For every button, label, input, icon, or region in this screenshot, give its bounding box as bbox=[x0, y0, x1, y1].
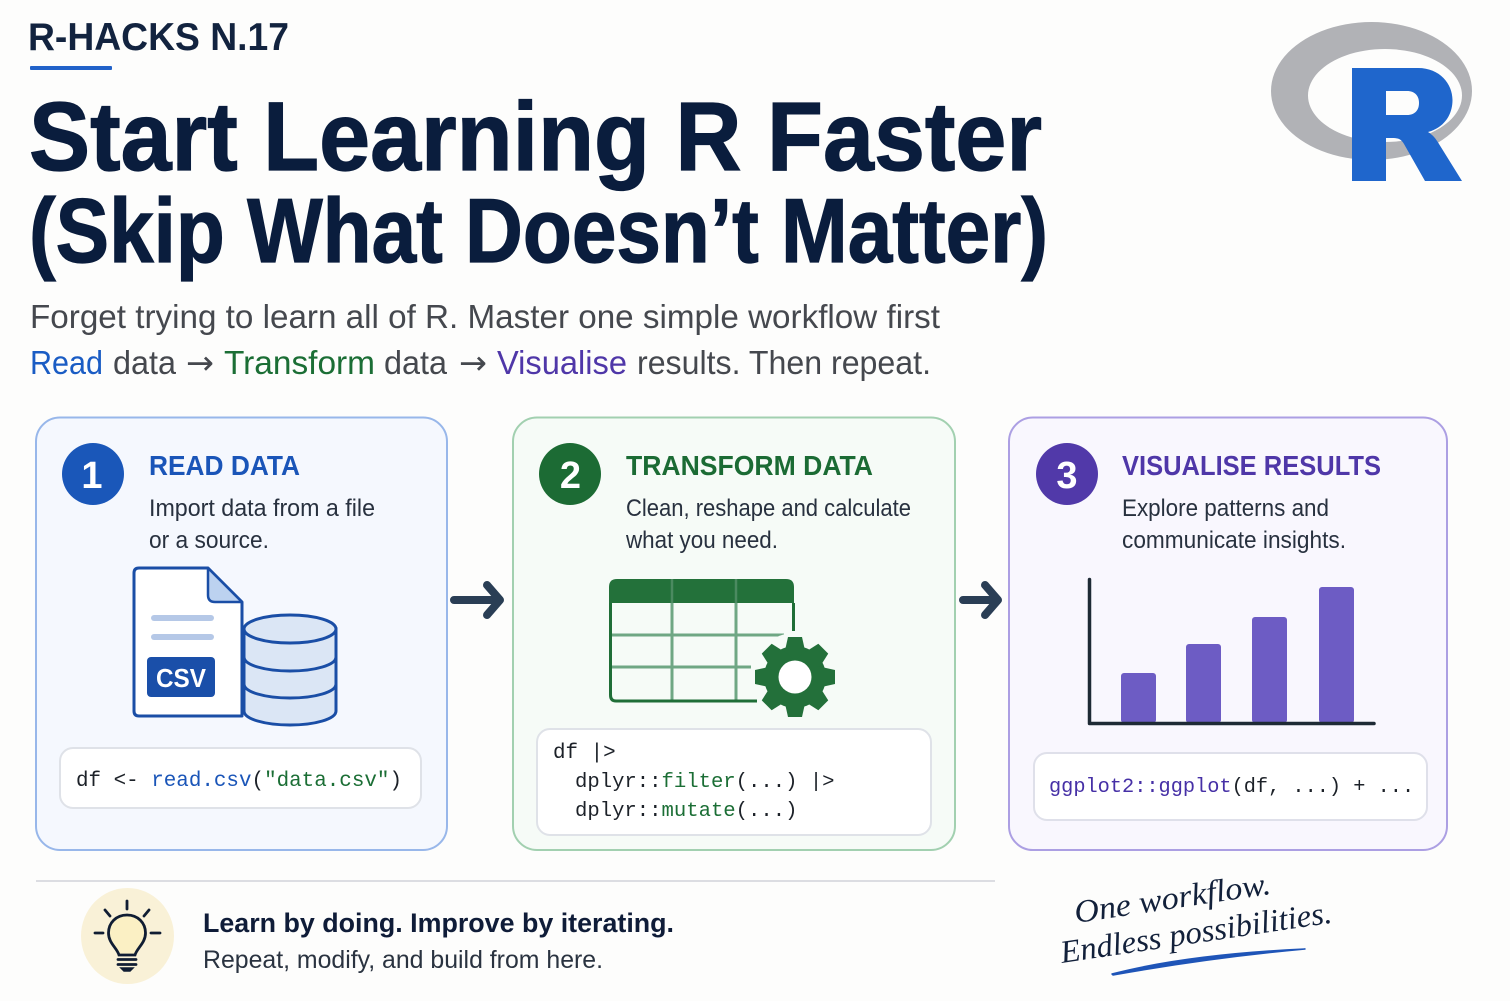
description: read data: or a source. bbox=[149, 527, 269, 554]
description: transform data: Clean, reshape and calculate bbox=[626, 495, 911, 522]
icon: csv file and database bbox=[134, 568, 336, 725]
code: dplyr pipeline: df |> bbox=[553, 742, 616, 765]
step badge 1: 1 bbox=[81, 455, 103, 497]
footer message bbox=[203, 908, 674, 974]
subtitle: Transform bbox=[224, 344, 375, 381]
description: visualise results: communicate insights. bbox=[1122, 527, 1346, 554]
step badge 3 bbox=[1036, 443, 1098, 505]
heading: read data: READ DATA bbox=[149, 450, 300, 481]
code: ggplot: ggplot2::ggplot(df, ...) + ... bbox=[1049, 776, 1414, 799]
footer message: Repeat, modify, and build from here. bbox=[203, 946, 603, 974]
code: dplyr pipeline: dplyr::filter(...) |> bbox=[575, 771, 835, 794]
step badge 2 bbox=[539, 443, 601, 505]
code: dplyr pipeline bbox=[537, 729, 931, 835]
description: read data bbox=[149, 495, 375, 554]
subtitle: data bbox=[384, 344, 448, 381]
panel: transform data bbox=[513, 418, 955, 850]
subtitle: → bbox=[186, 343, 214, 382]
heading: visualise results: VISUALISE RESULTS bbox=[1122, 450, 1381, 481]
code: dplyr pipeline: dplyr::mutate(...) bbox=[575, 800, 797, 823]
icon: table with gear bbox=[609, 579, 839, 721]
code: ggplot bbox=[1034, 753, 1427, 820]
description: read data: Import data from a file bbox=[149, 495, 375, 522]
icon: R logo bbox=[1271, 22, 1472, 181]
step badge 2: 2 bbox=[560, 455, 581, 497]
step badge 3: 3 bbox=[1056, 455, 1078, 497]
title bbox=[29, 82, 1048, 282]
code: read csv bbox=[60, 748, 421, 808]
description: transform data: what you need. bbox=[625, 527, 778, 554]
title: Start Learning R Faster bbox=[29, 82, 1042, 191]
description: transform data bbox=[625, 495, 911, 554]
arrow: read to transform bbox=[454, 585, 500, 615]
subtitle: data bbox=[113, 344, 177, 381]
icon: csv file and database: CSV bbox=[156, 663, 207, 693]
subtitle: → bbox=[459, 343, 487, 382]
divider bbox=[36, 880, 995, 882]
panel: visualise results bbox=[1009, 418, 1447, 850]
step badge 1 bbox=[62, 443, 124, 505]
handwritten note: One workflow. bbox=[1072, 865, 1273, 930]
handwritten note: Endless possibilities. bbox=[1057, 894, 1334, 970]
subtitle: Visualise bbox=[497, 344, 627, 381]
subtitle: Forget trying to learn all of R. Master one simple workflow first bbox=[30, 298, 940, 335]
footer message: Learn by doing. Improve by iterating. bbox=[203, 908, 674, 938]
title: (Skip What Doesn’t Matter) bbox=[29, 181, 1048, 282]
subtitle: results. Then repeat. bbox=[637, 344, 931, 381]
subtitle bbox=[30, 298, 940, 382]
heading: transform data: TRANSFORM DATA bbox=[626, 450, 873, 481]
subtitle: Read bbox=[30, 344, 103, 381]
series label: R-HACKS N.17 bbox=[28, 16, 289, 59]
handwritten note bbox=[1057, 865, 1334, 975]
description: visualise results: Explore patterns and bbox=[1122, 495, 1329, 522]
panel: read data bbox=[36, 418, 447, 850]
description: visualise results bbox=[1122, 495, 1346, 554]
arrow: transform to visualise bbox=[963, 585, 998, 615]
icon: light bulb bbox=[81, 888, 174, 984]
code: read csv: df <- read.csv("data.csv") bbox=[76, 770, 402, 793]
bar chart bbox=[1090, 580, 1374, 724]
